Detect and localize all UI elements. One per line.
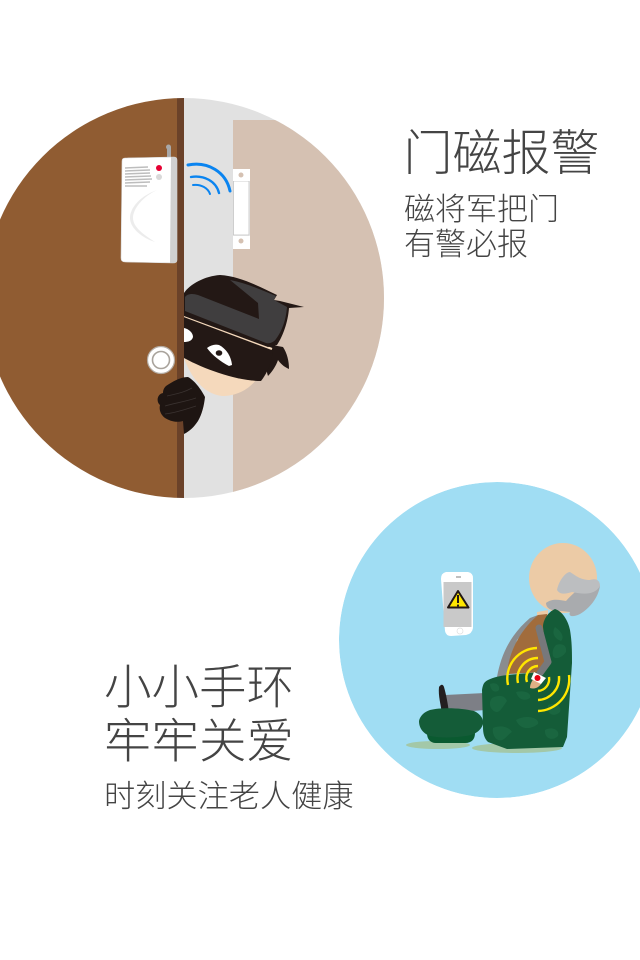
heading: bracelet care: 小小手环	[104, 662, 294, 715]
phone with warning	[441, 572, 473, 636]
infographic canvas	[0, 98, 640, 810]
armchair	[482, 609, 572, 749]
panel: door alarm illustration	[0, 90, 393, 505]
arm and hand	[530, 628, 548, 689]
leg and shoe	[438, 684, 483, 711]
wrist alarm band	[531, 672, 546, 684]
wireless signal arcs	[188, 164, 230, 194]
door	[0, 90, 184, 505]
text: door alarm description	[404, 192, 559, 262]
door magnet	[233, 169, 250, 249]
elderly man torso	[497, 614, 548, 677]
thief	[184, 275, 304, 396]
elderly man head	[529, 543, 600, 620]
footstool	[419, 708, 483, 743]
shadows	[406, 741, 562, 753]
text: door alarm description: 磁将军把门	[404, 192, 559, 227]
yellow signal arcs	[507, 648, 569, 711]
heading: door alarm: 门磁报警	[404, 127, 600, 181]
text: door alarm description: 有警必报	[404, 227, 528, 262]
text: bracelet care description: 时刻关注老人健康	[104, 779, 354, 814]
heading: bracelet care: 牢牢关爱	[104, 716, 294, 769]
alarm sensor	[121, 144, 177, 263]
heading: bracelet care	[104, 662, 294, 769]
panel: elder care illustration	[339, 482, 640, 798]
thief glove	[158, 377, 205, 434]
door knob	[148, 346, 174, 374]
